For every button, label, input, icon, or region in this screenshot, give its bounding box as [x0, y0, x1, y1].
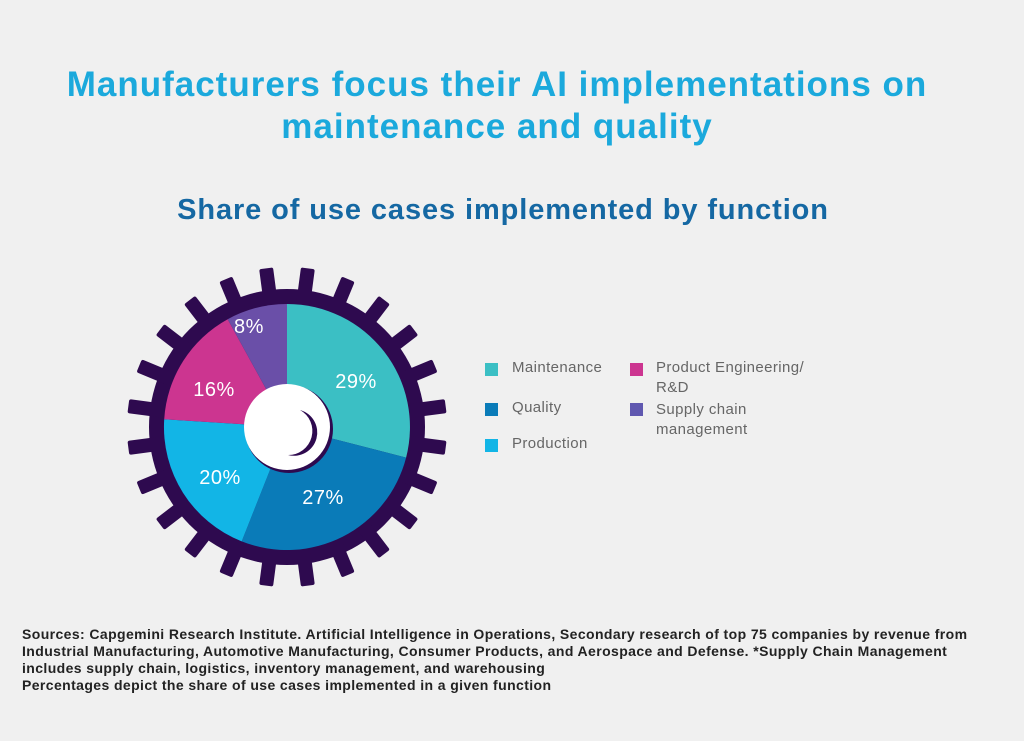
title — [67, 65, 927, 146]
subtitle: Share of use cases implemented by function — [177, 194, 829, 226]
gear pie chart: 29% — [335, 371, 377, 393]
legend — [485, 359, 804, 452]
legend: Production — [512, 435, 588, 452]
legend: management — [656, 421, 748, 438]
title: Manufacturers focus their AI implementations on — [67, 65, 927, 104]
legend: Maintenance — [512, 359, 602, 376]
sources footnote — [22, 626, 967, 693]
title: maintenance and quality — [281, 107, 713, 146]
gear pie chart: 8% — [234, 316, 264, 338]
gear pie chart: 20% — [199, 467, 241, 489]
sources footnote: Percentages depict the share of use cases implemented in a given function — [22, 677, 551, 693]
gear pie chart: 27% — [302, 487, 344, 509]
sources footnote: Sources: Capgemini Research Institute. Artificial Intelligence in Operations, Secondary research of top 75 companies by revenue from — [22, 626, 967, 642]
sources footnote: includes supply chain, logistics, inventory management, and warehousing — [22, 660, 545, 676]
legend: Product Engineering/ — [656, 359, 804, 376]
legend: R&D — [656, 379, 689, 396]
legend: Quality — [512, 399, 562, 416]
legend: Supply chain — [656, 401, 747, 418]
gear pie chart: 16% — [193, 379, 235, 401]
sources footnote: Industrial Manufacturing, Automotive Manufacturing, Consumer Products, and Aerospace and Defense. *Supply Chain Management — [22, 643, 947, 659]
